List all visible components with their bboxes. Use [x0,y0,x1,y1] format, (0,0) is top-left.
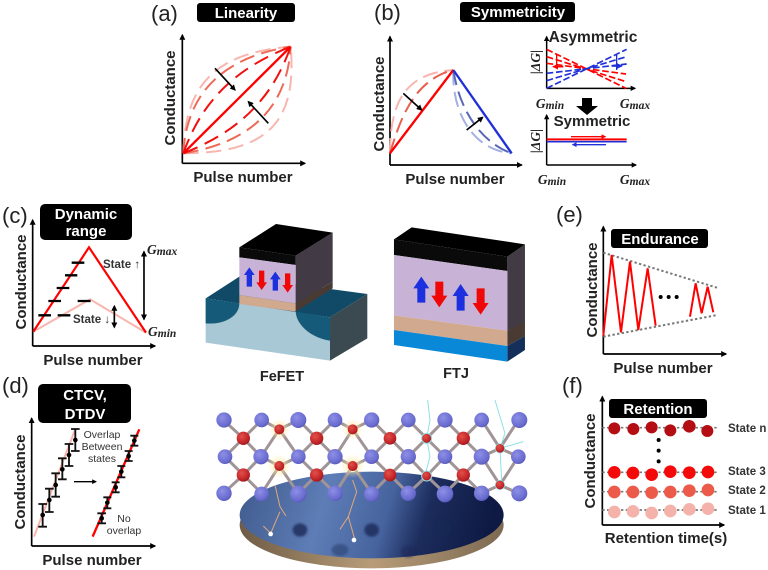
heading pill: Endurance: Endurance [621,231,699,248]
annotation: state down: State ↓ [73,314,110,326]
panel: (c) dynamic range [2,203,177,369]
y-axis label: Conductance [371,56,388,152]
panel: (e) endurance [556,202,726,377]
annotation: no overlap [107,513,141,537]
Gmin label: min [548,176,566,188]
heading pill: CTCV, DTDV: CTCV, [63,387,107,404]
wafer [240,472,504,568]
illustration: ferroelectric lattice on wafer [216,400,527,568]
label (b): (b) [374,0,401,25]
panel: (d) CTCV, DTDV [2,373,155,569]
chart: potentiation and depression curves [390,37,522,165]
panel: (b) symmetricity [371,0,650,188]
heading pill: Retention: Retention [623,401,693,418]
lattice bonds [223,420,518,493]
heading pill: Symmetricity: Symmetricity [471,4,566,21]
heading pill: CTCV, DTDV [38,384,131,423]
heading pill: Linearity: Linearity [215,5,278,22]
y-axis label: Conductance [582,413,599,509]
chart: linearity curves [182,35,305,163]
x-axis label: Pulse number [193,169,293,186]
label (e): (e) [556,202,583,227]
Gmin label: G [148,324,158,339]
Gmin label: G [538,172,548,187]
chart: retention [602,397,724,525]
label (c): (c) [2,203,28,228]
FeFET label: FeFET [260,369,304,385]
panel: (f) retention [562,373,766,547]
annotation: overlap between states: Between [82,441,123,453]
Gmax label: max [630,100,650,112]
arrow: asymmetric to symmetric [576,98,598,115]
device: FeFET [206,224,367,385]
Gmax label: G [147,242,157,257]
sub-chart: symmetric [528,113,650,188]
annotation: overlap between states: Overlap [84,429,121,441]
Gmin label: min [546,100,564,112]
asymmetric lines [547,37,635,88]
Gmax label: G [620,172,630,187]
heading pill: Dynamic range: range [66,223,106,240]
x-axis label: Pulse number [613,360,713,377]
annotation: no overlap: No [117,513,131,525]
FTJ label: FTJ [443,366,469,382]
state labels: State 2 [728,485,766,497]
Gmin label: G [536,96,546,111]
symmetric lines [547,115,636,165]
label (f): (f) [562,373,583,398]
y-axis label: Conductance [12,434,29,530]
Gmax label: G [620,96,630,111]
device: FTJ [394,227,525,382]
heading pill: Linearity [197,3,295,22]
chart: variation error bars [32,418,155,546]
label (d): (d) [2,373,29,398]
sub-chart: asymmetric [528,29,650,112]
Gmax label: max [630,176,650,188]
state labels: State n [728,423,766,435]
blue atoms [216,412,527,502]
annotation: state up: State ↑ [103,259,140,271]
symmetric title: Symmetric [554,113,630,130]
chart: endurance [603,227,726,354]
x-axis label: Pulse number [405,171,505,188]
y-axis label: Conductance [162,50,179,146]
y-axis label: Conductance [584,242,601,338]
state labels: State 1 [728,505,766,517]
FTJ 3D structure [394,227,525,362]
heading pill: Dynamic range: Dynamic [55,206,117,223]
annotation: overlap between states: states [88,453,116,465]
heading pill: Dynamic range [40,204,132,240]
panel: (a) linearity [151,1,305,186]
red atoms [237,424,505,490]
annotation: no overlap: overlap [107,525,141,537]
heading pill: CTCV, DTDV: DTDV [65,406,105,423]
heading pill: Symmetricity [460,2,575,22]
state labels: State 3 [728,466,766,478]
symmetric y label: |ΔG| [528,129,543,153]
heading pill: Retention [609,399,707,418]
FeFET 3D structure [206,224,367,361]
label (a): (a) [151,1,178,26]
Gmax label: max [157,246,177,258]
x-axis label: Pulse number [43,352,143,369]
annotation: overlap between states [82,429,123,465]
Gmin label: min [158,328,176,340]
y-axis label: Conductance [13,234,30,330]
state labels [728,423,766,517]
chart: dynamic range [33,220,155,346]
asymmetric y label: |ΔG| [528,50,543,74]
x-axis label: Pulse number [42,552,142,569]
sparks and glow [263,400,523,542]
x-axis label: Retention time(s) [605,530,727,547]
asymmetric title: Asymmetric [549,29,638,46]
